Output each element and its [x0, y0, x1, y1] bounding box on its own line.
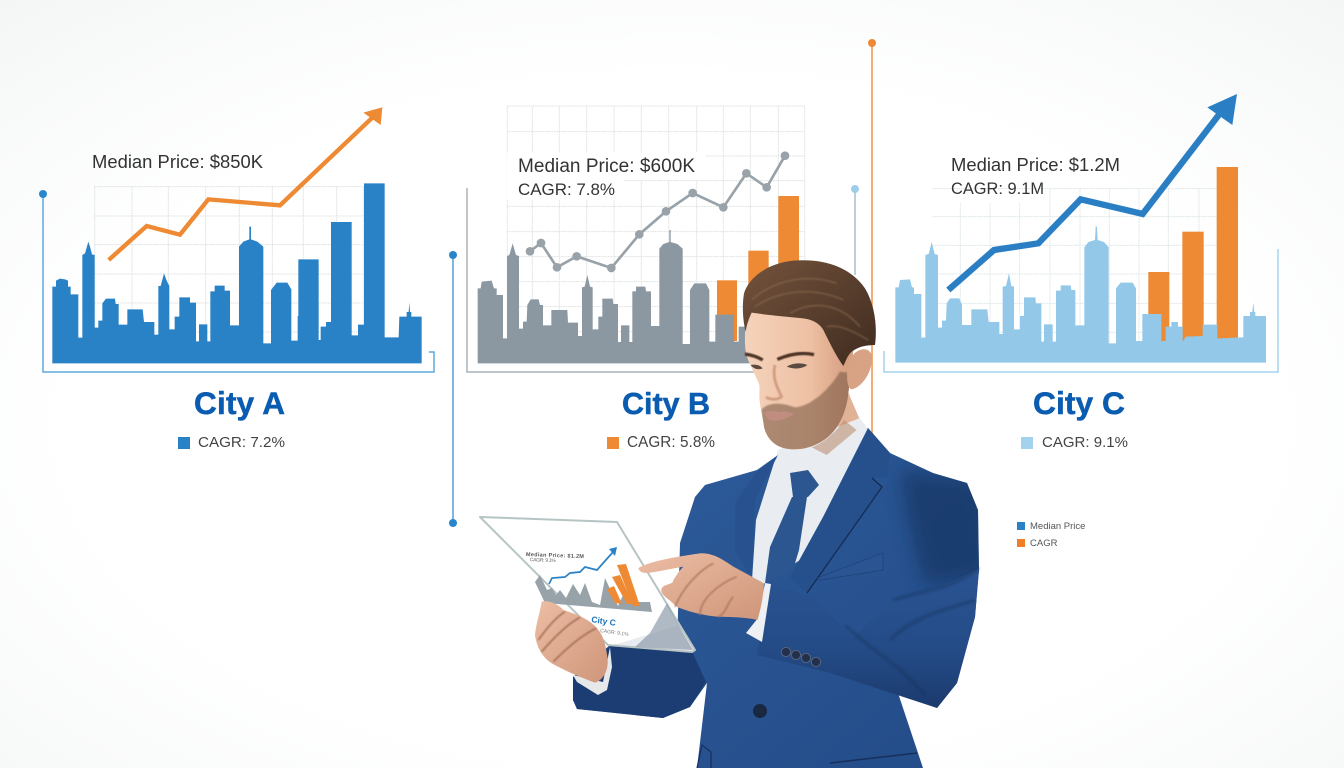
head — [743, 260, 876, 455]
connector line: light blue — [851, 185, 859, 275]
tablet mini skyline — [535, 575, 652, 612]
City B label backing — [507, 153, 705, 200]
hair strands — [752, 279, 868, 340]
sleeve buttons — [781, 647, 821, 667]
tablet mini bars — [607, 564, 640, 606]
tie — [765, 470, 819, 583]
lapels — [735, 428, 890, 593]
panel: City C — [884, 94, 1278, 451]
eyebrows — [745, 353, 814, 360]
City B skyline — [478, 230, 750, 363]
right sleeve — [757, 568, 979, 708]
legend: Median Price — [1030, 521, 1085, 532]
City C price and CAGR labels — [951, 154, 1120, 198]
City C axes — [884, 249, 1278, 372]
ear — [847, 349, 872, 389]
hair — [743, 260, 876, 366]
City B line chart — [526, 151, 789, 272]
panel: City A — [39, 107, 434, 451]
left hand — [535, 601, 608, 683]
neck shadow — [812, 420, 857, 455]
City A skyline and bars — [52, 183, 422, 363]
panel: City B — [467, 106, 805, 451]
pointing hand — [638, 553, 764, 620]
eyes — [751, 363, 807, 369]
tablet mini text: Median Price: $1.2M — [526, 552, 584, 560]
City C price and CAGR labels: CAGR: 9.1M — [951, 180, 1044, 198]
City B axes — [467, 188, 760, 372]
City A name: City A — [194, 385, 285, 421]
City B grid — [507, 106, 805, 357]
glass tablet — [480, 517, 695, 652]
City C skyline — [895, 227, 1266, 363]
face — [745, 307, 853, 449]
City C CAGR: CAGR: 9.1% — [1042, 434, 1128, 451]
City C orange bars — [1148, 167, 1238, 345]
City B price and CAGR labels: CAGR: 7.8% — [518, 180, 615, 199]
tablet mini text: CAGR: 9.1% — [530, 557, 556, 564]
City C trend arrow — [948, 94, 1237, 290]
legend: CAGR — [1030, 538, 1058, 549]
City A trend arrow — [109, 107, 382, 260]
City A CAGR: CAGR: 7.2% — [198, 434, 285, 451]
City C grid — [933, 189, 1217, 350]
City A grid — [95, 187, 363, 357]
tablet caption: CAGR: 9.1% — [600, 628, 629, 638]
jacket button and pocket — [697, 704, 917, 768]
neck — [780, 385, 860, 465]
City B CAGR: CAGR: 5.8% — [627, 434, 715, 451]
City C price and CAGR labels: Median Price: $1.2M — [951, 154, 1120, 175]
tablet city name: City C — [591, 614, 617, 628]
City B name: City B — [622, 387, 710, 421]
shirt cuff right — [746, 583, 771, 642]
City B price and CAGR labels: Median Price: $600K — [518, 156, 695, 177]
tablet mini text — [526, 552, 584, 565]
City B price and CAGR labels — [518, 156, 695, 199]
connector line: orange — [868, 39, 876, 440]
shirt — [752, 418, 870, 585]
City A axes — [39, 190, 434, 372]
tablet mini line — [549, 547, 617, 584]
lips — [764, 411, 794, 421]
connector line: blue — [449, 251, 457, 527]
City B orange bars — [717, 196, 799, 341]
shoulder shading — [900, 470, 990, 585]
nose shadow — [766, 365, 782, 399]
City C name: City C — [1033, 385, 1125, 421]
City A median price label: Median Price: $850K — [92, 151, 264, 172]
left shirt cuff — [573, 647, 612, 695]
legend — [1017, 521, 1085, 549]
breast pocket — [817, 553, 883, 580]
suit jacket — [573, 428, 979, 768]
businessman figure — [480, 260, 990, 768]
beard — [762, 372, 852, 450]
